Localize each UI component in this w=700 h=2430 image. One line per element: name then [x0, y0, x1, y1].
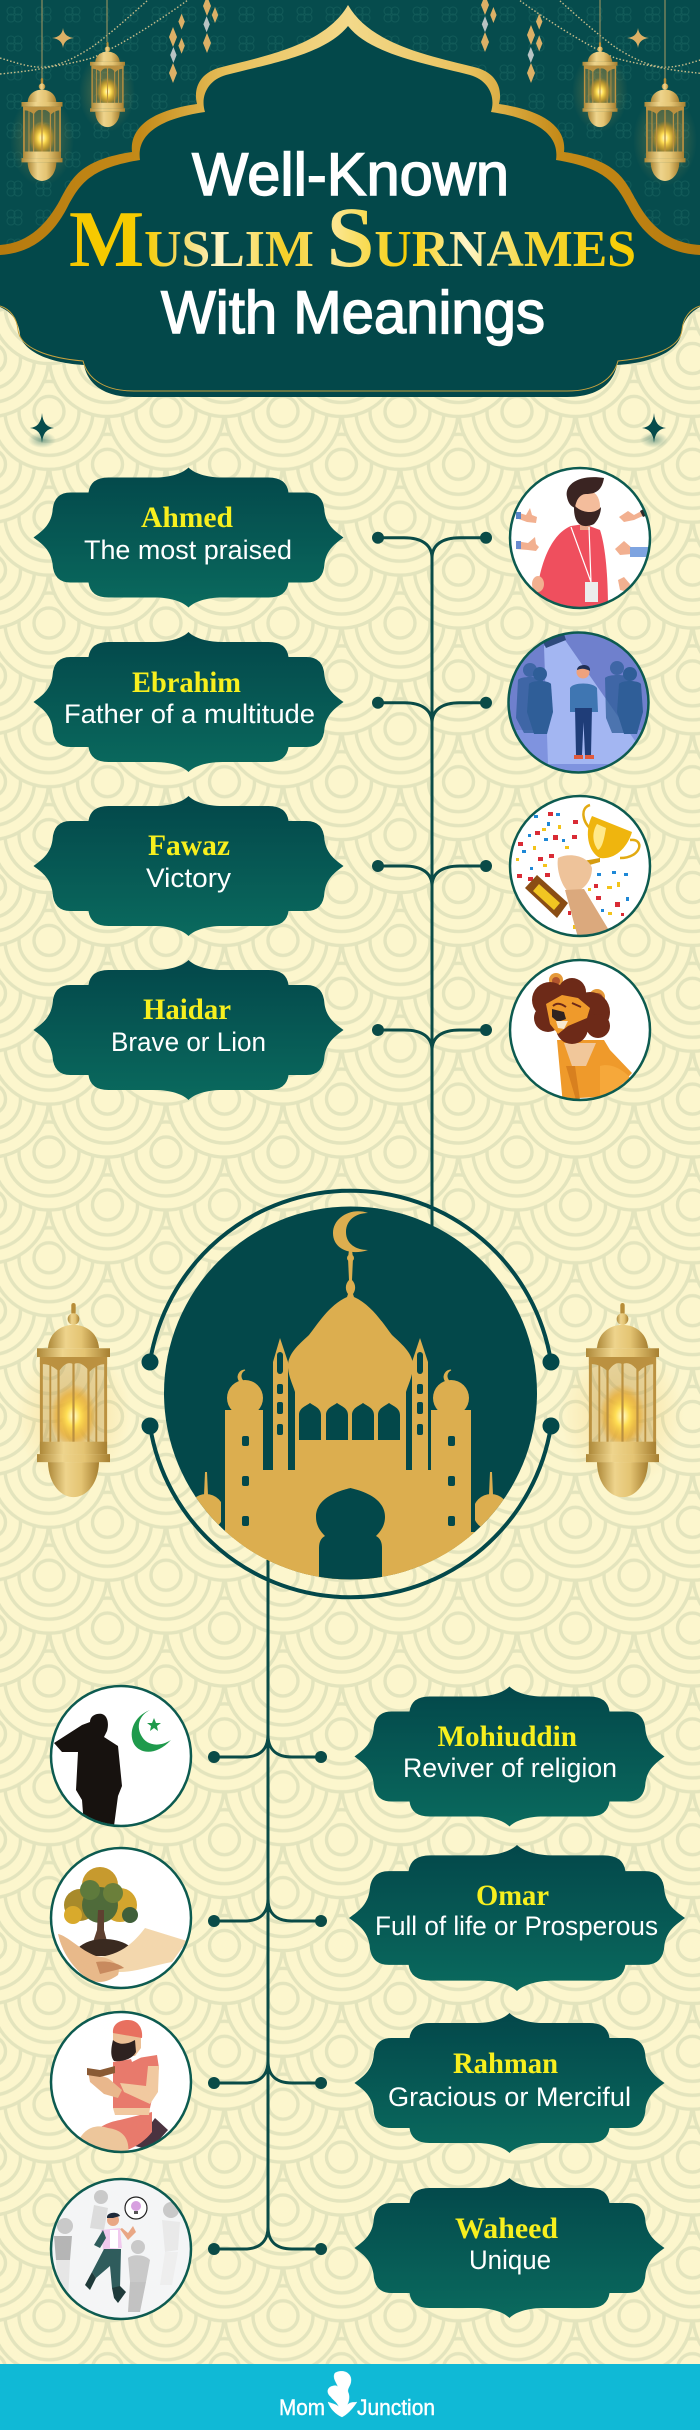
icon: saluting soldier and crescent: [51, 1686, 191, 1826]
panel: Mohiuddin: Mohiuddin: [438, 1720, 577, 1753]
icon: trophy and confetti: [510, 796, 650, 945]
title line 3: With Meanings: [161, 279, 545, 346]
panel: Haidar: Haidar: [143, 993, 231, 1026]
logo: MomJunction: Junction: [357, 2395, 435, 2420]
crescent: [333, 1211, 368, 1252]
icon: man reading book: [51, 2012, 191, 2154]
panel: Waheed: [354, 2178, 664, 2318]
panel: Ebrahim: Father of a multitude: [64, 699, 315, 729]
footer bar: [0, 2364, 700, 2430]
panel: Haidar: [34, 960, 344, 1100]
logo: MomJunction: [279, 2371, 435, 2420]
connector: upper branches: [372, 532, 492, 1226]
lantern: header left: [10, 0, 135, 186]
panel: Mohiuddin: [354, 1686, 664, 1826]
panel: Waheed: Unique: [469, 2245, 551, 2275]
tower windows: [242, 1436, 249, 1446]
panel: Waheed: Waheed: [455, 2212, 558, 2245]
panel: Fawaz: Fawaz: [148, 829, 230, 862]
panel: Omar: Full of life or Prosperous: [375, 1911, 658, 1941]
side domes: [196, 1494, 221, 1525]
title line 2: MUSLIM SURNAMES: [69, 189, 636, 285]
panel: Ahmed: The most praised: [84, 535, 292, 565]
panel: Ahmed: [34, 468, 344, 608]
panel: Fawaz: Victory: [146, 863, 232, 893]
lantern: middle left: [15, 1303, 131, 1497]
panel: Ahmed: Ahmed: [141, 501, 233, 534]
icon: man praised with thumbs up: [510, 468, 650, 610]
gold arch: [0, 5, 700, 300]
panel: Mohiuddin: Reviver of religion: [403, 1753, 617, 1783]
panel: Fawaz: [34, 796, 344, 936]
panel: Rahman: Rahman: [453, 2047, 558, 2080]
title line 1: Well-Known: [192, 141, 509, 208]
main dome: [288, 1250, 413, 1470]
lantern: header right: [572, 0, 697, 186]
outer towers: [227, 1380, 263, 1410]
lantern: middle right: [560, 1303, 684, 1497]
icon: dark stars: [28, 413, 668, 448]
door: [316, 1488, 385, 1590]
title panel: [0, 26, 700, 397]
icon: lion: [510, 960, 650, 1105]
icon: boy standing out in crowd: [51, 2179, 191, 2319]
logo: MomJunction: Mom: [279, 2395, 325, 2420]
title: [69, 141, 636, 346]
minarets: [273, 1338, 288, 1470]
diamonds: hanging ornaments: [169, 0, 542, 83]
garland: right strands: [519, 0, 700, 74]
panel: Ebrahim: [34, 632, 344, 772]
panel: Rahman: [354, 2013, 664, 2153]
minaret windows: [277, 1352, 283, 1374]
icon: mosque medallion: [164, 1206, 537, 1580]
base: [225, 1470, 470, 1580]
logo icon: [328, 2371, 357, 2417]
panel: Haidar: Brave or Lion: [111, 1027, 266, 1057]
icon: tree in hands: [51, 1848, 191, 1988]
panel: Omar: [349, 1845, 685, 1991]
panel: Omar: Omar: [476, 1879, 549, 1912]
panel: Ebrahim: Ebrahim: [132, 666, 241, 699]
garland: left strands: [0, 0, 188, 74]
drum arches: [299, 1403, 321, 1440]
icon: man in spotlight: [505, 632, 655, 780]
sparkles: gold stars: [52, 28, 649, 48]
ring with dots: [142, 1191, 560, 1597]
header banner: [0, 0, 700, 397]
panel: Rahman: Gracious or Merciful: [388, 2082, 631, 2112]
connector: lower branches: [208, 1560, 327, 2255]
